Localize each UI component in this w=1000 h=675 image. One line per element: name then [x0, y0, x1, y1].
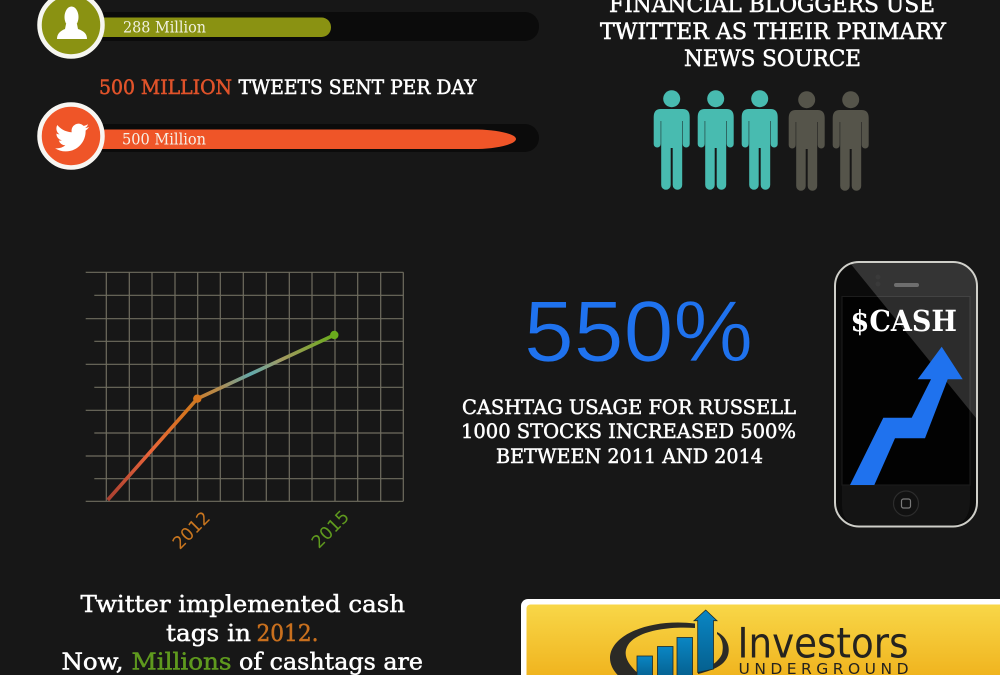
text block: financial bloggers: NEWS SOURCE — [684, 47, 861, 72]
person 3 — [742, 90, 778, 190]
bar fill: 500 million — [90, 130, 516, 149]
panel: tweets bar — [40, 104, 539, 168]
banner frame — [521, 599, 1000, 675]
icon: twitter badge — [40, 104, 102, 168]
bar label: 500 Million — [122, 130, 206, 148]
point: 2012 — [193, 394, 202, 403]
pictogram: three of five people — [654, 90, 869, 191]
person 5 — [833, 91, 869, 191]
phone bezel shade — [842, 485, 970, 525]
heading: tweets per day: 500 MILLION — [99, 75, 232, 99]
growth line — [108, 335, 334, 500]
panel: investors underground banner — [521, 599, 1000, 675]
phone body — [835, 262, 977, 526]
heading: tweets per day: TWEETS SENT PER DAY — [238, 75, 477, 99]
text block: cash tags: 2012. — [256, 619, 318, 647]
bar track — [90, 124, 539, 152]
text block: cash tags: tags in — [166, 619, 251, 647]
phone label: $CASH: $CASH — [850, 304, 957, 338]
bar fill: 288 million — [90, 18, 331, 37]
person 1 — [654, 90, 690, 190]
bar label: 288 Million — [123, 18, 206, 36]
text block: cashtag usage: CASHTAG USAGE FOR RUSSELL — [462, 396, 796, 419]
text block: cash tags: Millions — [132, 648, 232, 675]
text block: cashtag usage: 1000 STOCKS INCREASED 500% — [461, 420, 796, 443]
text block: cash tags: of cashtags are — [239, 648, 423, 675]
text block: cash tags: Now, — [62, 648, 124, 675]
axis label: 2015: 2015 — [308, 507, 354, 553]
person 2 — [698, 90, 734, 190]
logo arrow — [694, 610, 717, 672]
phone glare — [850, 263, 976, 418]
point: 2015 — [330, 331, 338, 339]
logo mark — [610, 610, 729, 675]
person 4 — [789, 91, 825, 191]
phone camera — [876, 274, 880, 286]
big number: 550%: 550% — [524, 284, 753, 380]
phone home button — [894, 491, 918, 516]
phone speaker — [894, 283, 919, 287]
bar track — [90, 12, 539, 41]
text block: cash tags: Twitter implemented cash — [80, 590, 405, 618]
axis label: 2012: 2012 — [169, 508, 215, 554]
panel: monthly users bar — [40, 0, 539, 56]
icon: user badge — [40, 0, 102, 56]
phone screen — [842, 296, 970, 485]
logo swoosh — [610, 622, 695, 675]
text block: cashtag usage: BETWEEN 2011 AND 2014 — [496, 445, 763, 468]
arrow: rising blue — [850, 347, 963, 485]
text block: financial bloggers: TWITTER AS THEIR PRIMARY — [600, 20, 946, 45]
logo bars — [637, 638, 692, 675]
logo wordmark: Investors — [738, 618, 908, 668]
icon: smartphone — [835, 262, 977, 526]
text block: financial bloggers — [600, 0, 946, 72]
line chart: cashtag growth — [86, 272, 403, 554]
text block: cash tags — [62, 590, 423, 675]
chart grid — [86, 272, 403, 501]
banner fill — [526, 604, 1000, 675]
text block: cashtag usage — [461, 396, 796, 468]
